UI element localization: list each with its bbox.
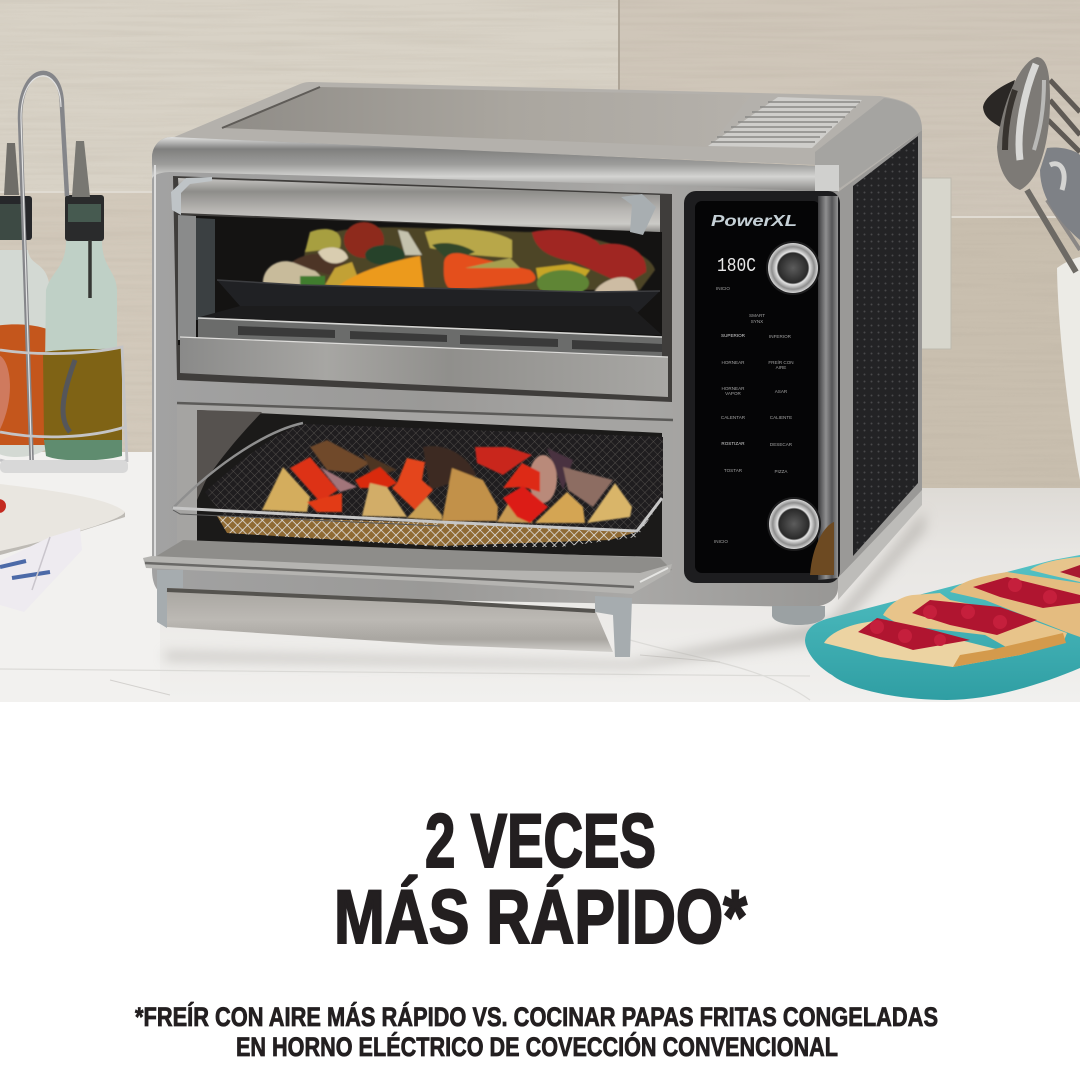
pastry second <box>883 593 1067 655</box>
tiled kitchen wall <box>0 0 1080 500</box>
base band <box>838 490 922 600</box>
glass oil bottles in wire caddy <box>0 73 128 473</box>
temperature display: 180C <box>717 255 756 277</box>
control panel <box>684 191 840 583</box>
second spoon <box>1040 147 1080 240</box>
panel function labels: TOSTAR <box>724 468 743 473</box>
panel function labels: HORNEAR <box>722 386 745 391</box>
oil bottle left <box>0 143 53 457</box>
panel function labels: INICIO <box>716 286 730 291</box>
brand logo: PowerXL <box>711 213 797 230</box>
plate of cherry pastries <box>805 555 1080 700</box>
door panel <box>180 337 668 397</box>
pastry third <box>950 572 1080 637</box>
panel function labels <box>714 286 794 544</box>
panel function labels: ASAR <box>775 389 788 394</box>
main spoon <box>997 57 1050 190</box>
panel function labels: CALIENTE <box>770 415 792 420</box>
white caption area <box>0 702 1080 1080</box>
panel function labels: FREÍR CON <box>768 359 794 365</box>
pastry back <box>1030 557 1080 582</box>
panel function labels: AIRE <box>776 365 786 370</box>
pastry front <box>824 620 1063 667</box>
caddy handle <box>20 73 67 472</box>
panel function labels: ROSTIZAR <box>721 441 745 446</box>
right top edge <box>815 98 922 188</box>
polished top band <box>152 137 838 192</box>
footnote <box>135 1002 938 1062</box>
air-fry basket <box>173 498 662 547</box>
panel function labels: INICIO <box>714 539 728 544</box>
door handle lowered <box>167 588 613 652</box>
footnote: EN HORNO ELÉCTRICO DE COVECCIÓN CONVENCIONAL <box>236 1032 838 1062</box>
panel function labels: CALENTAR <box>721 415 746 420</box>
heading <box>334 799 747 960</box>
product photo scene <box>0 0 1080 702</box>
door glass hinge arms <box>157 570 183 628</box>
pulled-down door <box>143 540 672 594</box>
caddy base <box>0 347 128 469</box>
side panel <box>838 130 922 578</box>
panel function labels: DESECAR <box>770 442 793 447</box>
spatula <box>983 80 1015 128</box>
oven front panel <box>152 137 838 607</box>
oven foot <box>772 606 825 625</box>
cutting board and napkin <box>0 484 125 612</box>
top vent <box>708 97 862 148</box>
top knob <box>766 241 820 295</box>
holder <box>1057 257 1080 480</box>
marble counter <box>0 452 1080 702</box>
left frame highlight <box>154 165 156 565</box>
fork tines <box>1048 80 1080 152</box>
wall outlet plate <box>918 178 951 349</box>
handles <box>1027 190 1076 272</box>
panel function labels: SUPERIOR <box>721 333 746 338</box>
panel function labels: SYNX <box>751 319 763 324</box>
wire rack <box>198 306 662 358</box>
heading: MÁS RÁPIDO* <box>334 875 747 960</box>
roasted vegetables <box>262 440 632 523</box>
panel function labels: HORNEAR <box>722 360 745 365</box>
heading: 2 VECES <box>425 799 656 884</box>
door handle <box>171 177 660 235</box>
panel function labels: INFERIOR <box>769 334 792 339</box>
oil bottle right <box>43 141 122 460</box>
utensils in white holder <box>983 57 1080 480</box>
top surface <box>172 82 922 192</box>
teal plate <box>805 555 1080 700</box>
top oven compartment <box>171 176 672 402</box>
panel function labels: VAPOR <box>725 391 742 396</box>
panel function labels: SMART <box>749 313 765 318</box>
upper food <box>263 222 655 296</box>
black tray <box>217 280 660 323</box>
soft shadow under oven <box>165 510 925 668</box>
bottom oven compartment <box>143 403 673 657</box>
bottom knob <box>767 497 821 551</box>
oven <box>143 82 922 657</box>
panel function labels: PIZZA <box>774 469 788 474</box>
